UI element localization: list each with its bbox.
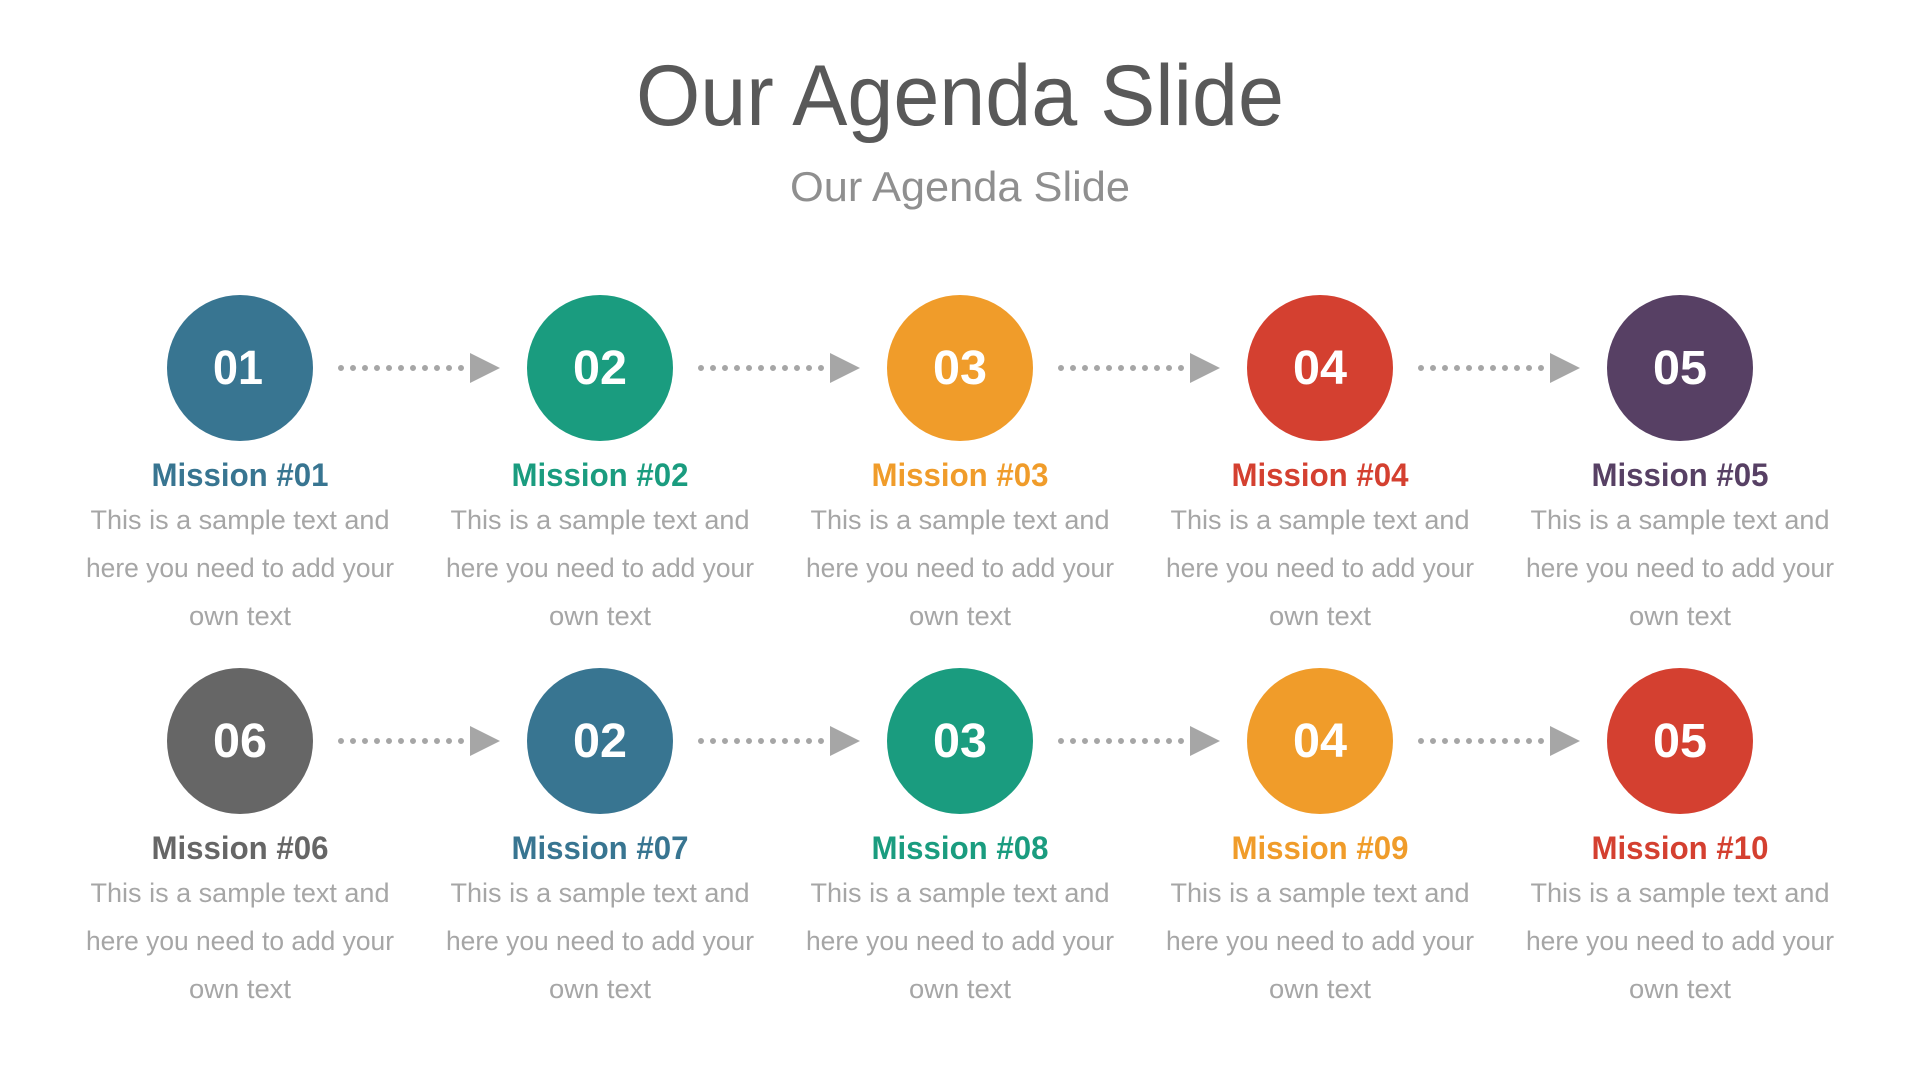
badge 05: [1607, 295, 1753, 441]
title: Our Agenda Slide: [636, 48, 1284, 144]
arrow 06 to 07: [341, 726, 500, 756]
description: This is a sample text and: [1170, 878, 1470, 908]
description: here you need to add your: [1166, 553, 1474, 583]
description: own text: [909, 601, 1011, 631]
badge 03: [887, 668, 1033, 814]
description: here you need to add your: [86, 926, 394, 956]
description: here you need to add your: [806, 926, 1114, 956]
description: [1166, 878, 1474, 1004]
description: here you need to add your: [446, 553, 754, 583]
description: This is a sample text and: [1530, 878, 1830, 908]
description: here you need to add your: [1526, 553, 1834, 583]
description: own text: [1269, 974, 1371, 1004]
description: own text: [549, 601, 651, 631]
heading: Mission #10: Mission #10: [1592, 830, 1768, 866]
badge 02: 02: [573, 342, 627, 395]
arrow 08 to 09: [1061, 726, 1220, 756]
arrow 04 to 05: [1421, 353, 1580, 383]
badge 02: [527, 295, 673, 441]
item: mission 07: [446, 668, 754, 1004]
description: This is a sample text and: [90, 878, 390, 908]
description: own text: [189, 974, 291, 1004]
item: mission 09: [1166, 668, 1474, 1004]
badge 05: [1607, 668, 1753, 814]
description: own text: [549, 974, 651, 1004]
item: mission 04: [1166, 295, 1474, 631]
arrow 01 to 02: [341, 353, 500, 383]
description: [86, 878, 394, 1004]
description: This is a sample text and: [1170, 505, 1470, 535]
description: own text: [189, 601, 291, 631]
description: [1526, 878, 1834, 1004]
badge 03: [887, 295, 1033, 441]
description: own text: [1269, 601, 1371, 631]
badge 04: 04: [1293, 715, 1347, 768]
description: here you need to add your: [806, 553, 1114, 583]
heading: Mission #09: Mission #09: [1232, 830, 1408, 866]
arrow 09 to 10: [1421, 726, 1580, 756]
description: [806, 505, 1114, 631]
heading: Mission #07: Mission #07: [512, 830, 688, 866]
item: mission 10: [1526, 668, 1834, 1004]
description: here you need to add your: [1166, 926, 1474, 956]
badge 04: 04: [1293, 342, 1347, 395]
description: own text: [1629, 974, 1731, 1004]
heading: Mission #01: Mission #01: [152, 457, 328, 493]
description: This is a sample text and: [810, 505, 1110, 535]
description: here you need to add your: [1526, 926, 1834, 956]
description: [1166, 505, 1474, 631]
item: mission 08: [806, 668, 1114, 1004]
item: mission 06: [86, 668, 394, 1004]
heading: Mission #03: Mission #03: [872, 457, 1048, 493]
item: mission 03: [806, 295, 1114, 631]
badge 04: [1247, 668, 1393, 814]
heading: Mission #04: Mission #04: [1232, 457, 1409, 493]
badge 03: 03: [933, 715, 987, 768]
badge 01: 01: [213, 342, 263, 395]
description: [806, 878, 1114, 1004]
arrow 02 to 03: [701, 353, 860, 383]
description: own text: [909, 974, 1011, 1004]
description: This is a sample text and: [450, 505, 750, 535]
badge 02: [527, 668, 673, 814]
heading: Mission #05: Mission #05: [1592, 457, 1768, 493]
heading: Mission #06: Mission #06: [152, 830, 328, 866]
item: mission 01: [86, 295, 394, 631]
description: This is a sample text and: [90, 505, 390, 535]
description: [86, 505, 394, 631]
description: [446, 878, 754, 1004]
item: mission 05: [1526, 295, 1834, 631]
badge 06: [167, 668, 313, 814]
badge 06: 06: [213, 715, 267, 768]
subtitle: Our Agenda Slide: [790, 163, 1130, 210]
description: This is a sample text and: [450, 878, 750, 908]
badge 05: 05: [1653, 715, 1707, 768]
arrow 03 to 04: [1061, 353, 1220, 383]
badge 03: 03: [933, 342, 987, 395]
heading: Mission #02: Mission #02: [512, 457, 688, 493]
description: [446, 505, 754, 631]
badge 05: 05: [1653, 342, 1707, 395]
description: here you need to add your: [86, 553, 394, 583]
description: This is a sample text and: [1530, 505, 1830, 535]
item: mission 02: [446, 295, 754, 631]
badge 04: [1247, 295, 1393, 441]
badge 01: [167, 295, 313, 441]
badge 02: 02: [573, 715, 627, 768]
description: here you need to add your: [446, 926, 754, 956]
heading: Mission #08: Mission #08: [872, 830, 1048, 866]
arrow 07 to 08: [701, 726, 860, 756]
description: own text: [1629, 601, 1731, 631]
description: [1526, 505, 1834, 631]
description: This is a sample text and: [810, 878, 1110, 908]
